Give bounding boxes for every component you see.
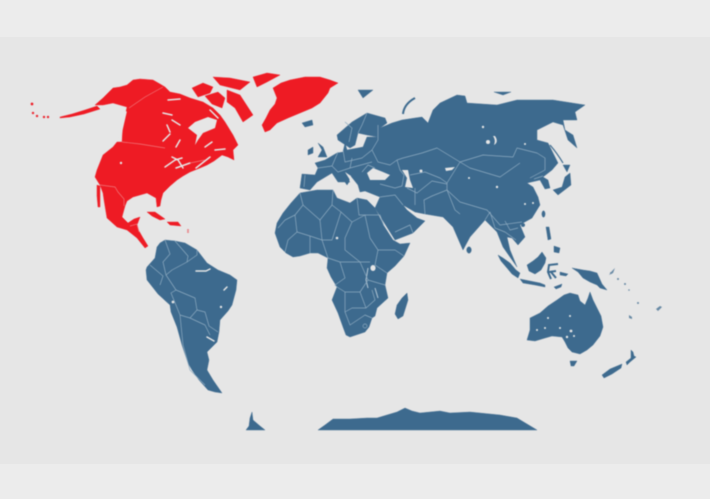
lakes of Africa <box>336 237 378 298</box>
island: Svalbard <box>358 90 373 98</box>
islands: Mindanao <box>554 246 560 253</box>
lakes and river mouths of South America <box>196 269 227 341</box>
island: Iceland <box>302 120 313 127</box>
island: Tasmania <box>570 361 577 366</box>
borders: South America <box>150 240 218 385</box>
landmass: Eurasia <box>300 90 585 267</box>
island: Sri Lanka <box>467 247 471 253</box>
islands: Japan <box>553 173 571 195</box>
island: New Guinea <box>572 268 607 290</box>
borders: Africa <box>278 190 404 328</box>
Hudson Bay and lakes <box>120 99 225 168</box>
landmass: Africa <box>275 190 410 337</box>
Greenland <box>262 77 338 132</box>
island: Borneo <box>527 252 546 274</box>
seas and lakes <box>345 126 534 205</box>
islands: Pacific archipelagos <box>609 268 662 319</box>
landmass: Australia <box>527 292 603 354</box>
Arctic islands <box>192 73 280 122</box>
island: Madagascar <box>395 293 408 319</box>
island: Java <box>520 279 545 287</box>
highlighted region: North America <box>31 73 338 248</box>
island: Hainan <box>521 223 525 227</box>
island: Sulawesi <box>548 264 558 279</box>
islands: New Zealand <box>602 350 636 378</box>
island: Sakhalin <box>550 145 563 163</box>
landmass: South America <box>146 240 237 393</box>
island: Taiwan <box>542 211 545 217</box>
islands: Maluku <box>560 272 568 276</box>
island: Sumatra <box>498 255 520 278</box>
borders: USA, Canada and Mexico <box>100 87 205 232</box>
island: Great Britain <box>318 143 327 157</box>
world map group <box>31 73 662 430</box>
islands: Philippines <box>546 227 551 240</box>
landmass: Antarctica <box>246 408 537 430</box>
islands: Arctic Russia <box>494 92 511 95</box>
island: Ireland <box>308 147 313 155</box>
islands: Lesser Sunda and Timor <box>554 284 562 289</box>
borders: Eurasia <box>304 113 545 240</box>
island: Novaya Zemlya <box>403 98 415 114</box>
island: Hokkaido <box>563 165 570 172</box>
